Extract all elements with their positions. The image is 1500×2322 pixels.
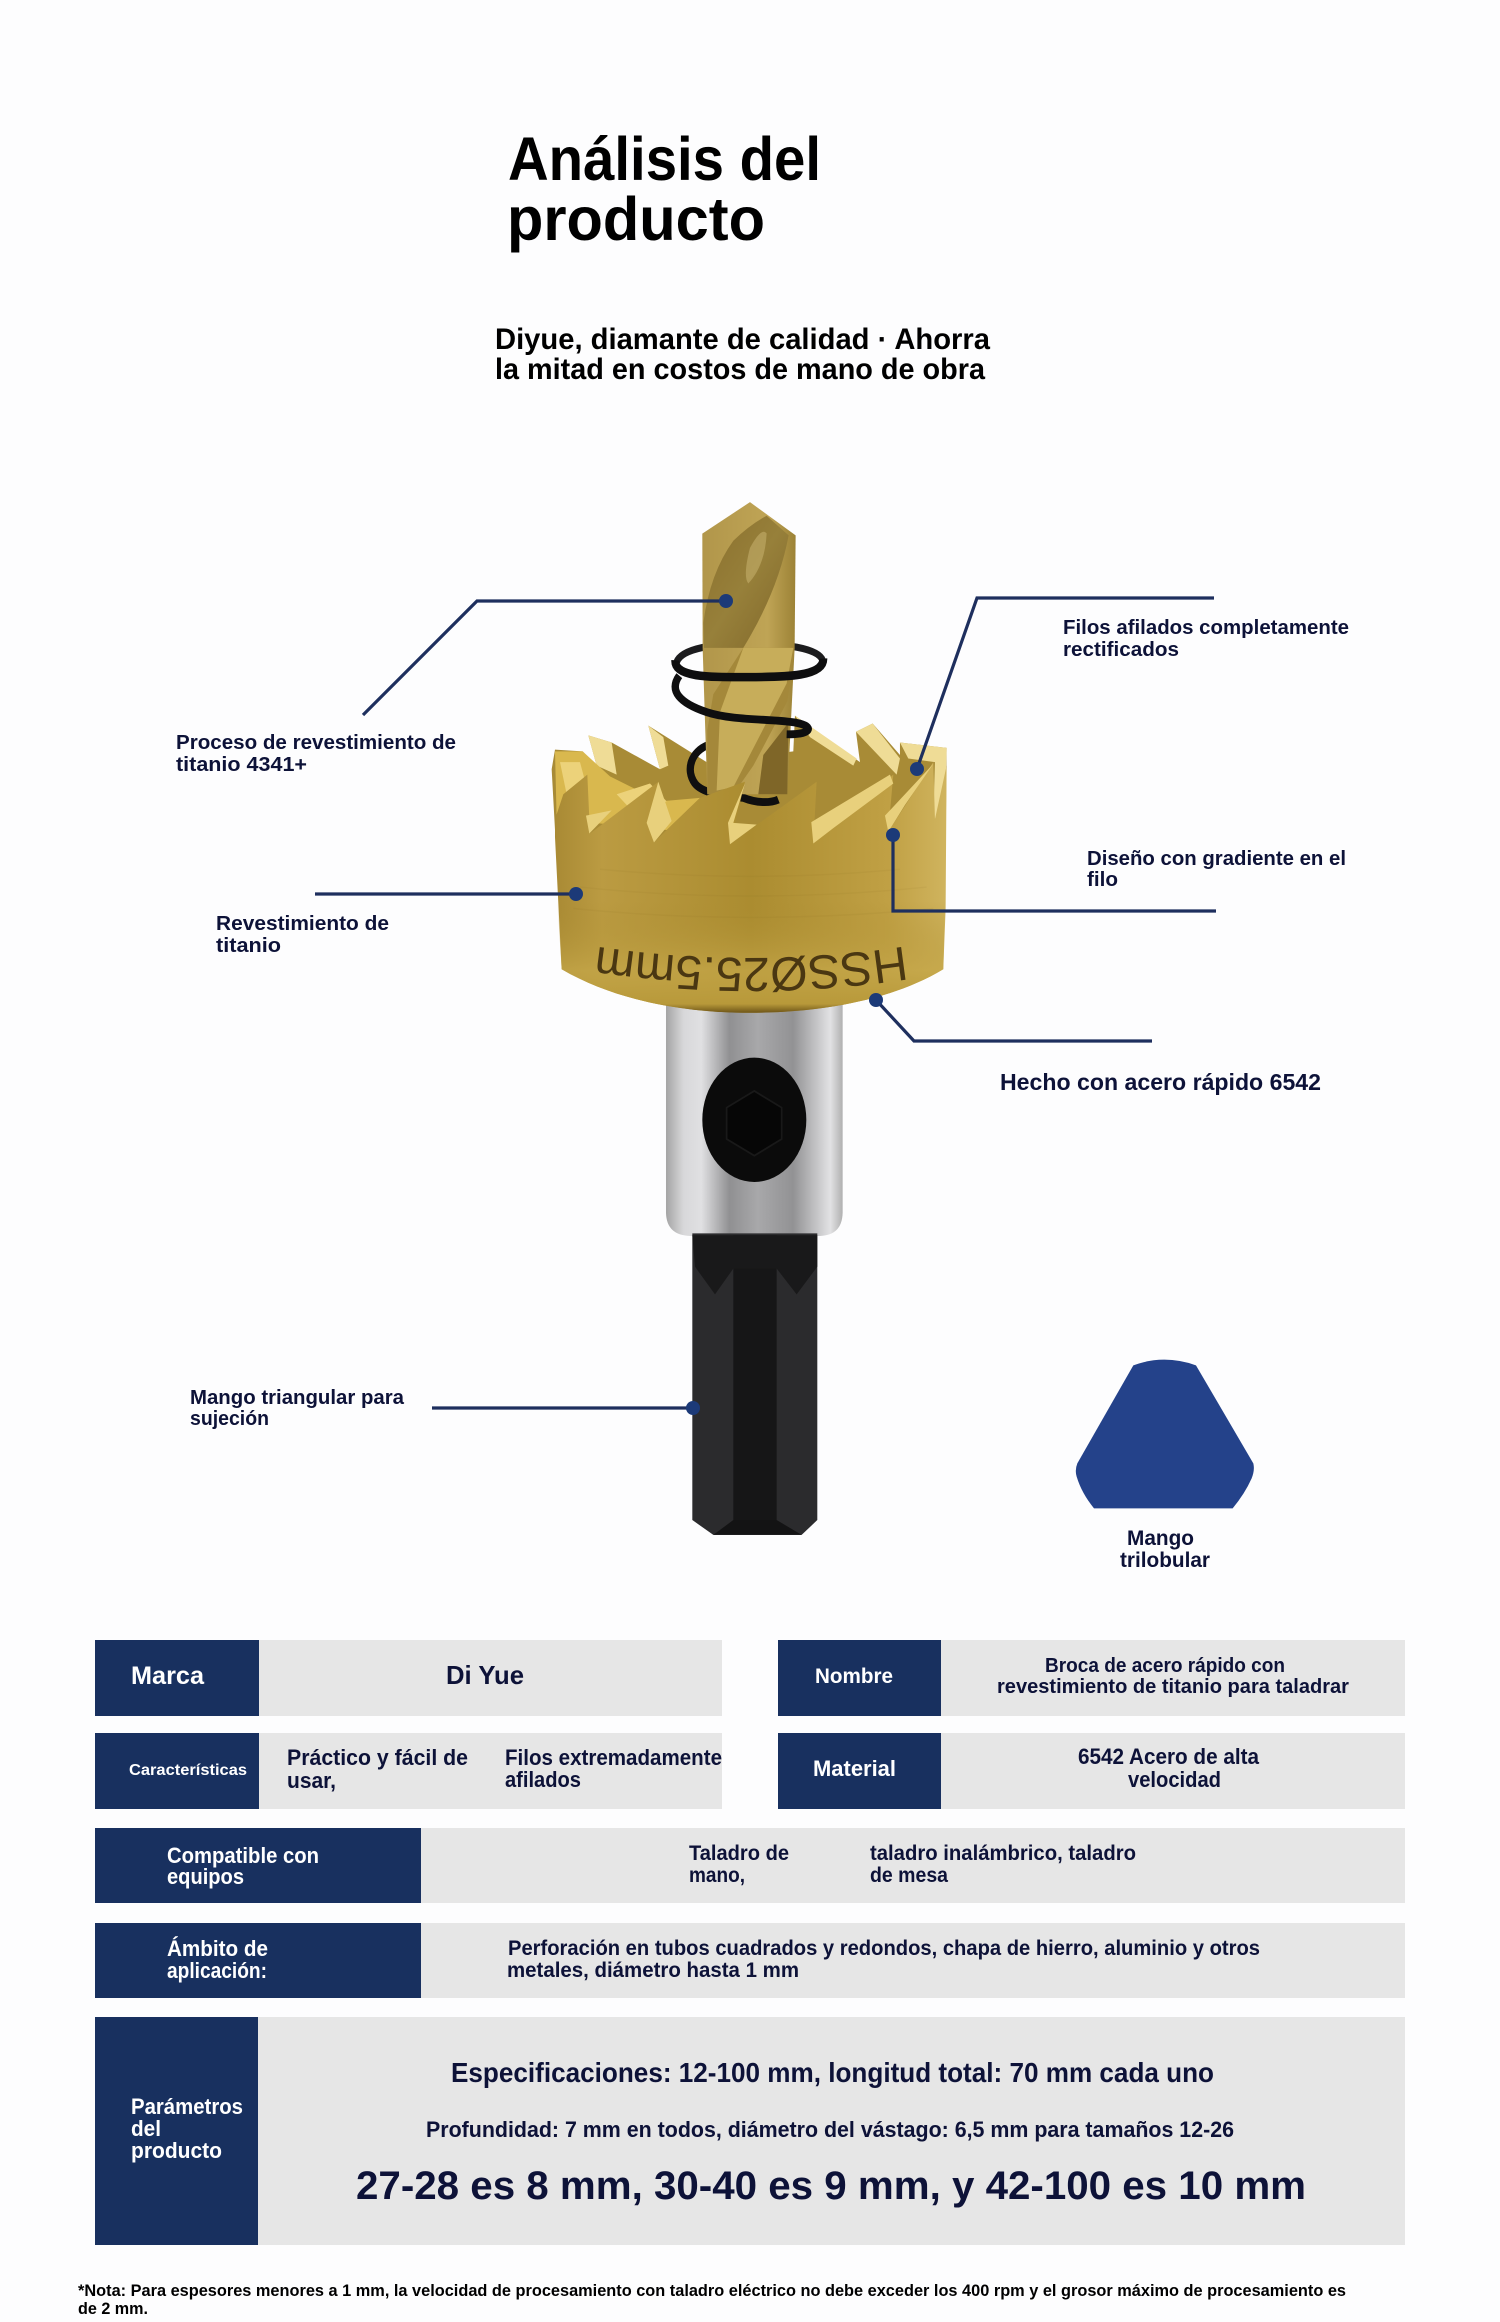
row: Características: Práctico y fácil de bbox=[287, 1745, 468, 1770]
row: Características: usar, bbox=[287, 1768, 336, 1793]
row: Ámbito de aplicación: Ámbito de bbox=[167, 1936, 268, 1961]
row: Ámbito de aplicación: aplicación: bbox=[167, 1958, 267, 1983]
row: Nombre: Broca de acero rápido con bbox=[1045, 1655, 1285, 1677]
row: Ámbito de aplicación: Perforación en tubos cuadrados y redondos, chapa de hierro, aluminio y otros bbox=[508, 1937, 1260, 1960]
row: Características: afilados bbox=[505, 1767, 581, 1792]
row: Parámetros del producto: Parámetros bbox=[131, 2094, 243, 2119]
callout: Filos afilados: rectificados bbox=[1063, 639, 1179, 661]
brushed lines bbox=[573, 869, 933, 917]
row: Material: Material bbox=[813, 1756, 896, 1781]
title bbox=[507, 125, 821, 253]
row: Compatible con equipos: de mesa bbox=[870, 1864, 948, 1887]
callout: Hecho con acero bbox=[869, 993, 1321, 1095]
icon: trilobular cross-section: trilobular bbox=[1120, 1549, 1210, 1572]
front wall bbox=[555, 762, 947, 1013]
icon: trilobular cross-section: Mango bbox=[1127, 1527, 1194, 1550]
row: Parámetros del producto: producto bbox=[131, 2138, 222, 2163]
silver arbor with set screw bbox=[666, 1002, 843, 1236]
callout: Diseño con gradiente: filo bbox=[1087, 869, 1118, 891]
callout: Diseño con gradiente bbox=[886, 828, 1346, 911]
title: Análisis del bbox=[508, 125, 821, 193]
panel: specification table bbox=[95, 1640, 1405, 2245]
row: Nombre: Nombre bbox=[815, 1665, 893, 1688]
row: Características bbox=[95, 1733, 722, 1809]
row: Material bbox=[778, 1733, 1405, 1809]
middle coil bbox=[675, 676, 808, 734]
row: Compatible con equipos bbox=[95, 1828, 1405, 1903]
row: Marca: Marca bbox=[131, 1662, 205, 1690]
row: Características: Características bbox=[129, 1762, 247, 1779]
tooth facets bbox=[586, 764, 933, 844]
row: Ámbito de aplicación: metales, diámetro hasta 1 mm bbox=[507, 1959, 799, 1982]
engraved marking: HSSØ25.5mm bbox=[598, 947, 906, 992]
callout: Mango triangular bbox=[190, 1387, 700, 1430]
row: Compatible con equipos: taladro inalámbrico, taladro bbox=[870, 1842, 1136, 1865]
row: Marca: Di Yue bbox=[446, 1660, 524, 1690]
black triangular shank bbox=[692, 1233, 817, 1535]
row: Compatible con equipos: Taladro de bbox=[689, 1842, 789, 1865]
icon: trilobular cross-section bbox=[1076, 1360, 1254, 1572]
callout: Diseño con gradiente: Diseño con gradiente en el bbox=[1087, 848, 1346, 870]
row: Parámetros del producto: Especificaciones: 12-100 mm, longitud total: 70 mm cada uno bbox=[451, 2057, 1214, 2088]
row: Parámetros del producto bbox=[95, 2017, 1405, 2245]
drill bit illustration bbox=[552, 502, 953, 1535]
callout: Mango triangular: Mango triangular para bbox=[190, 1387, 405, 1409]
row: Compatible con equipos: mano, bbox=[689, 1864, 745, 1887]
row: Ámbito de aplicación bbox=[95, 1923, 1405, 1998]
callout: Hecho con acero: Hecho con acero rápido 6542 bbox=[1000, 1069, 1321, 1095]
row: Parámetros del producto: 27-28 es 8 mm, 30-40 es 9 mm, y 42-100 es 10 mm bbox=[356, 2164, 1306, 2208]
row: Nombre bbox=[778, 1640, 1405, 1716]
subtitle bbox=[495, 323, 990, 386]
gold crown and pilot bit bbox=[552, 502, 947, 1013]
callout: Mango triangular: sujeción bbox=[190, 1408, 269, 1430]
callout: Proceso de revestimiento: Proceso de revestimiento de bbox=[176, 732, 456, 754]
row: Compatible con equipos: equipos bbox=[167, 1864, 244, 1889]
row: Parámetros del producto: Profundidad: 7 mm en todos, diámetro del vástago: 6,5 mm para tamaños 12-26 bbox=[426, 2117, 1234, 2142]
callout: Filos afilados bbox=[910, 598, 1349, 776]
callout: Proceso de revestimiento bbox=[176, 594, 733, 776]
rear teeth bbox=[552, 716, 947, 848]
row: Características: Filos extremadamente bbox=[505, 1745, 722, 1770]
row: Material: velocidad bbox=[1128, 1767, 1221, 1792]
callout: Filos afilados: Filos afilados completamente bbox=[1063, 617, 1349, 639]
subtitle: Diyue, diamante de calidad · Ahorra bbox=[495, 323, 990, 356]
row: Material: 6542 Acero de alta bbox=[1078, 1744, 1260, 1769]
callout: Revestimiento de titanio: Revestimiento de bbox=[216, 913, 389, 935]
callout: Revestimiento de titanio bbox=[216, 887, 583, 957]
footnote: de 2 mm. bbox=[78, 2299, 148, 2318]
callout: Revestimiento de titanio: titanio bbox=[216, 935, 281, 957]
row: Parámetros del producto: del bbox=[131, 2116, 161, 2141]
top coil back half bbox=[677, 644, 823, 662]
footnote: *Nota: Para espesores menores a 1 mm, la velocidad de procesamiento con taladro eléctrico no debe exceder los 400 rpm y el grosor máximo de procesamiento es bbox=[78, 2281, 1346, 2300]
top coil front half bbox=[675, 659, 823, 677]
subtitle: la mitad en costos de mano de obra bbox=[495, 353, 985, 386]
pilot bit bbox=[702, 502, 796, 794]
rear spring coil bbox=[690, 745, 778, 802]
row: Compatible con equipos: Compatible con bbox=[167, 1843, 319, 1868]
row: Marca bbox=[95, 1640, 722, 1716]
callout: Proceso de revestimiento: titanio 4341+ bbox=[176, 754, 307, 776]
title: producto bbox=[507, 185, 765, 253]
row: Nombre: revestimiento de titanio para taladrar bbox=[997, 1676, 1349, 1698]
footnote bbox=[78, 2281, 1346, 2318]
